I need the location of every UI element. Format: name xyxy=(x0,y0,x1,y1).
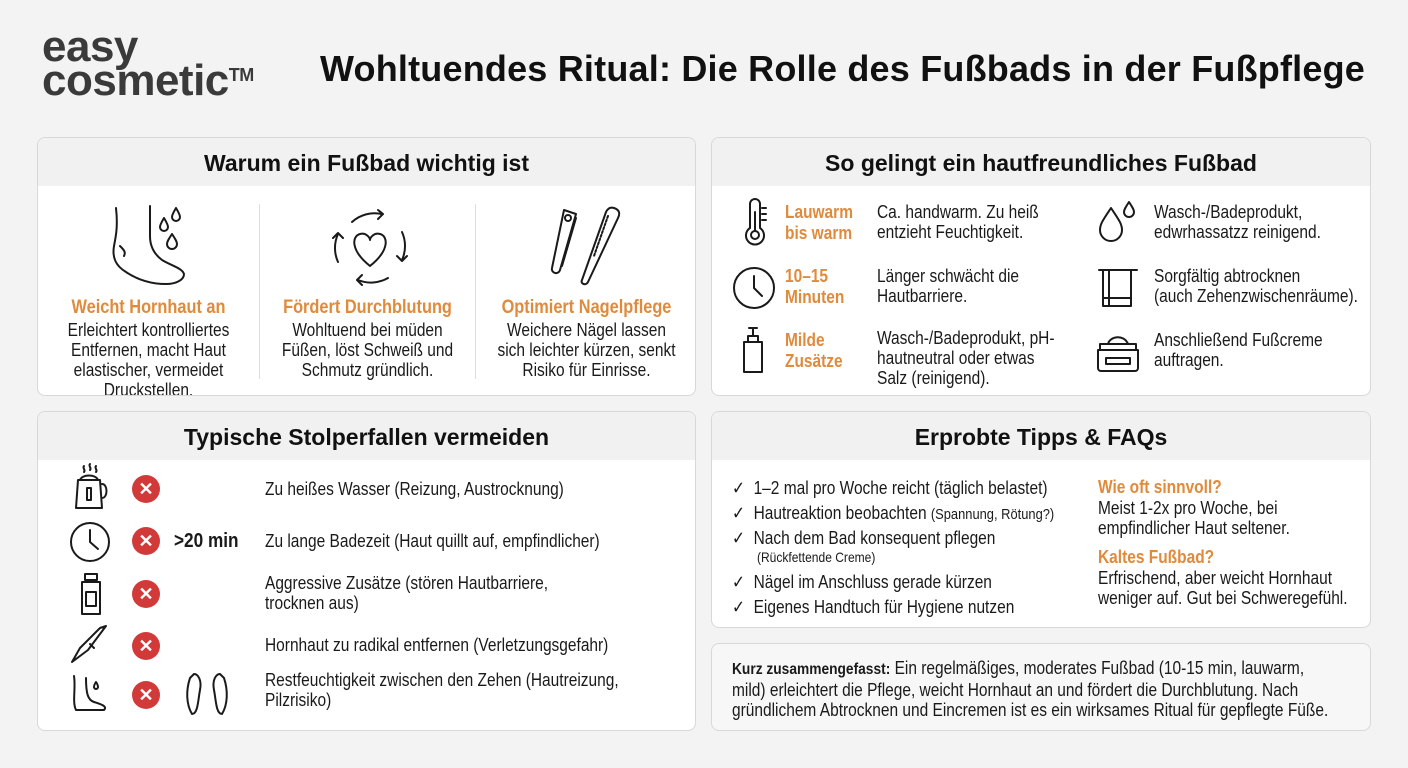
panel: summary xyxy=(711,643,1371,731)
icon: kettle xyxy=(75,463,108,509)
panel: so gelingt: Ca. handwarm. Zu heiß xyxy=(877,202,1039,222)
heading xyxy=(38,138,695,186)
heading: Erprobte Tipps & FAQs xyxy=(915,424,1167,450)
label lauwarm: Lauwarm xyxy=(785,202,853,222)
checklist: (Rückfettende Creme) xyxy=(757,549,875,565)
heading xyxy=(712,138,1370,186)
checklist: ✓ 1–2 mal pro Woche reicht (täglich belastet) xyxy=(732,478,1048,498)
panel: stolperfallen: Zu heißes Wasser (Reizung, Austrocknung) xyxy=(265,479,564,499)
item 1: Erleichtert kontrolliertes xyxy=(68,320,229,340)
panel: stolperfallen: Hornhaut zu radikal entfernen (Verletzungsgefahr) xyxy=(265,635,608,655)
panel: so gelingt: Sorgfältig abtrocknen xyxy=(1154,266,1300,286)
icon: thermometer xyxy=(745,198,767,246)
panel: stolperfallen: Zu lange Badezeit (Haut quillt auf, empfindlicher) xyxy=(265,531,600,551)
icon: scalpel xyxy=(71,625,107,663)
label lauwarm: bis warm xyxy=(785,223,852,243)
icon: pump bottle xyxy=(743,327,763,373)
icon: foot with drops xyxy=(112,205,185,285)
faq: empfindlicher Haut seltener. xyxy=(1098,518,1290,538)
label lauwarm xyxy=(785,202,853,243)
panel: so gelingt: Wasch-/Badeprodukt, xyxy=(1154,202,1302,222)
panel: stolperfallen: ✕ xyxy=(138,685,154,705)
icon: cream jar xyxy=(1097,336,1139,372)
panel: stolperfallen: Aggressive Zusätze (stören Hautbarriere, xyxy=(265,573,548,593)
icon: feet xyxy=(186,673,228,715)
panel: tipps xyxy=(711,411,1371,628)
label milde xyxy=(785,330,843,371)
logo: easy xyxy=(42,22,138,71)
panel: summary: gründlichem Abtrocknen und Eincremen ist es ein wirksames Ritual für gepflegte Füße. xyxy=(732,700,1328,720)
icon: bottle xyxy=(81,573,101,615)
item 1 xyxy=(68,297,229,396)
icon: heart cycle xyxy=(332,209,408,286)
item 2: Fördert Durchblutung xyxy=(283,297,452,318)
panel: stolperfallen: Restfeuchtigkeit zwischen den Zehen (Hautreizung, xyxy=(265,670,619,690)
label milde: Zusätze xyxy=(785,351,843,371)
item 3: Risiko für Einrisse. xyxy=(522,360,651,380)
item 3: Optimiert Nagelpflege xyxy=(502,297,671,318)
item 3: sich leichter kürzen, senkt xyxy=(497,340,676,360)
panel: stolperfallen: ✕ xyxy=(138,584,154,604)
panel: so gelingt: Hautbarriere. xyxy=(877,286,967,306)
item 3 xyxy=(497,297,676,380)
label minuten: Minuten xyxy=(785,287,844,307)
panel: stolperfallen: trocknen aus) xyxy=(265,593,359,613)
item 2 xyxy=(282,297,453,380)
faq: Kaltes Fußbad? xyxy=(1098,547,1214,567)
checklist: ✓ Nach dem Bad konsequent pflegen xyxy=(732,528,995,548)
panel: so gelingt: (auch Zehenzwischenräume). xyxy=(1154,286,1358,306)
panel: so gelingt: Länger schwächt die xyxy=(877,266,1019,286)
icon: towel xyxy=(1098,269,1138,307)
label minuten xyxy=(785,266,844,307)
panel: stolperfallen: ✕ xyxy=(138,531,154,551)
faq xyxy=(1098,477,1348,608)
faq: weniger auf. Gut bei Schweregefühl. xyxy=(1098,588,1348,608)
panel: so gelingt: hautneutral oder etwas xyxy=(877,348,1034,368)
item 1: Entfernen, macht Haut xyxy=(71,340,226,360)
item 2: Füßen, löst Schweiß und xyxy=(282,340,453,360)
item 2: Schmutz gründlich. xyxy=(302,360,433,380)
panel: summary: mild) erleichtert die Pflege, weicht Hornhaut an und fördert die Durchblutung. Nach xyxy=(732,680,1298,700)
checklist: ✓ Eigenes Handtuch für Hygiene nutzen xyxy=(732,597,1014,617)
panel: so gelingt: auftragen. xyxy=(1154,350,1224,370)
label minuten: 10–15 xyxy=(785,266,828,286)
panel: so gelingt: edwrhassatzz reinigend. xyxy=(1154,222,1321,242)
panel: so gelingt: Anschließend Fußcreme xyxy=(1154,330,1323,350)
item 3: Weichere Nägel lassen xyxy=(507,320,666,340)
checklist: ✓ Nägel im Anschluss gerade kürzen xyxy=(732,572,992,592)
panel: stolperfallen: Pilzrisiko) xyxy=(265,690,331,710)
label milde: Milde xyxy=(785,330,825,350)
panel: stolperfallen: ✕ xyxy=(138,636,154,656)
heading: Typische Stolperfallen vermeiden xyxy=(184,424,549,450)
panel: so gelingt: Salz (reinigend). xyxy=(877,368,990,388)
panel: so gelingt: Wasch-/Badeprodukt, pH- xyxy=(877,328,1055,348)
icon: clock xyxy=(733,267,775,309)
faq: Wie oft sinnvoll? xyxy=(1098,477,1222,497)
panel: stolperfallen: >20 min xyxy=(174,530,239,552)
faq: Meist 1-2x pro Woche, bei xyxy=(1098,498,1278,518)
panel: so gelingt: entzieht Feuchtigkeit. xyxy=(877,222,1023,242)
checklist xyxy=(732,478,1054,617)
title: Wohltuendes Ritual: Die Rolle des Fußbads in der Fußpflege xyxy=(320,48,1365,89)
heading xyxy=(38,412,695,460)
heading: Warum ein Fußbad wichtig ist xyxy=(204,150,529,176)
item 1: Weicht Hornhaut an xyxy=(71,297,226,318)
heading xyxy=(712,412,1370,460)
icon: wet foot xyxy=(73,675,106,711)
panel: warum xyxy=(37,137,696,396)
icon: clock xyxy=(70,522,110,562)
icon: nail clipper and file xyxy=(550,206,620,286)
item 2: Wohltuend bei müden xyxy=(292,320,443,340)
faq: Erfrischend, aber weicht Hornhaut xyxy=(1098,568,1332,588)
logo: cosmeticTM xyxy=(42,56,254,105)
panel: stolperfallen: ✕ xyxy=(138,479,154,499)
checklist: ✓ Hautreaktion beobachten (Spannung, Rötung?) xyxy=(732,503,1054,523)
panel: so gelingt xyxy=(711,137,1371,396)
icon: drops xyxy=(1099,201,1135,242)
panel: stolperfallen xyxy=(37,411,696,731)
logo xyxy=(42,22,254,105)
item 1: elastischer, vermeidet xyxy=(74,360,223,380)
heading: So gelingt ein hautfreundliches Fußbad xyxy=(825,150,1257,176)
panel: summary: Kurz zusammengefasst: Ein regelmäßiges, moderates Fußbad (10-15 min, lauwarm, xyxy=(732,658,1304,678)
